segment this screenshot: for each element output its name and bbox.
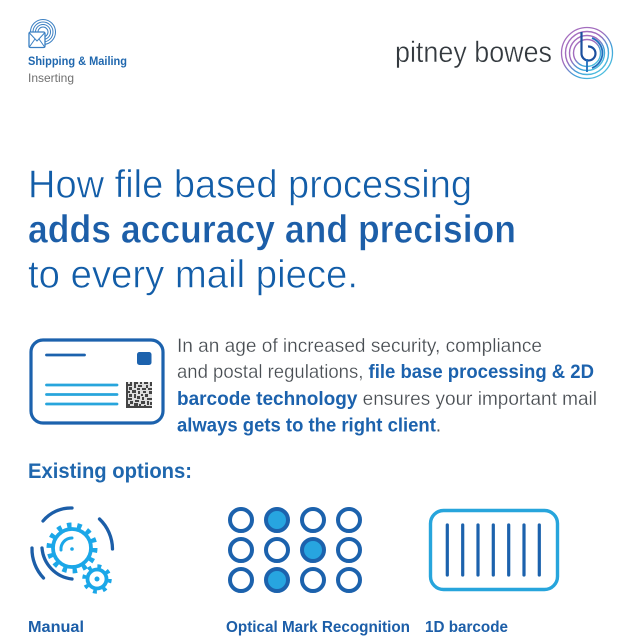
- body text: always gets to the right client.: [177, 414, 441, 436]
- label: optical mark recognition: Optical Mark Recognition: [226, 619, 410, 636]
- logo wordmark: pitney bowes: [395, 36, 552, 69]
- label: manual: Manual: [28, 619, 84, 636]
- icon: pitney bowes logo rings: [562, 28, 612, 78]
- label: 1D barcode: 1D barcode: [425, 619, 508, 636]
- body text: and postal regulations, file base processing & 2D: [177, 361, 594, 383]
- category label: Shipping & Mailing: [28, 54, 127, 68]
- sub-category label: Inserting: [28, 71, 74, 85]
- body text: barcode technology ensures your important mail: [177, 388, 597, 410]
- icon: 1D barcode: [430, 510, 558, 590]
- title: to every mail piece.: [28, 254, 358, 296]
- section heading: Existing options:: [28, 460, 192, 483]
- body text: In an age of increased security, compliance: [177, 335, 542, 357]
- icon: optical mark grid: [230, 509, 360, 591]
- icon: envelope with signal rings: [29, 20, 56, 48]
- title: adds accuracy and precision: [28, 208, 516, 252]
- title: [28, 164, 516, 296]
- icon: manual gears: [32, 508, 112, 592]
- body text: [177, 335, 597, 436]
- icon: mail piece with 2D barcode: [31, 340, 163, 423]
- title: How file based processing: [28, 164, 472, 206]
